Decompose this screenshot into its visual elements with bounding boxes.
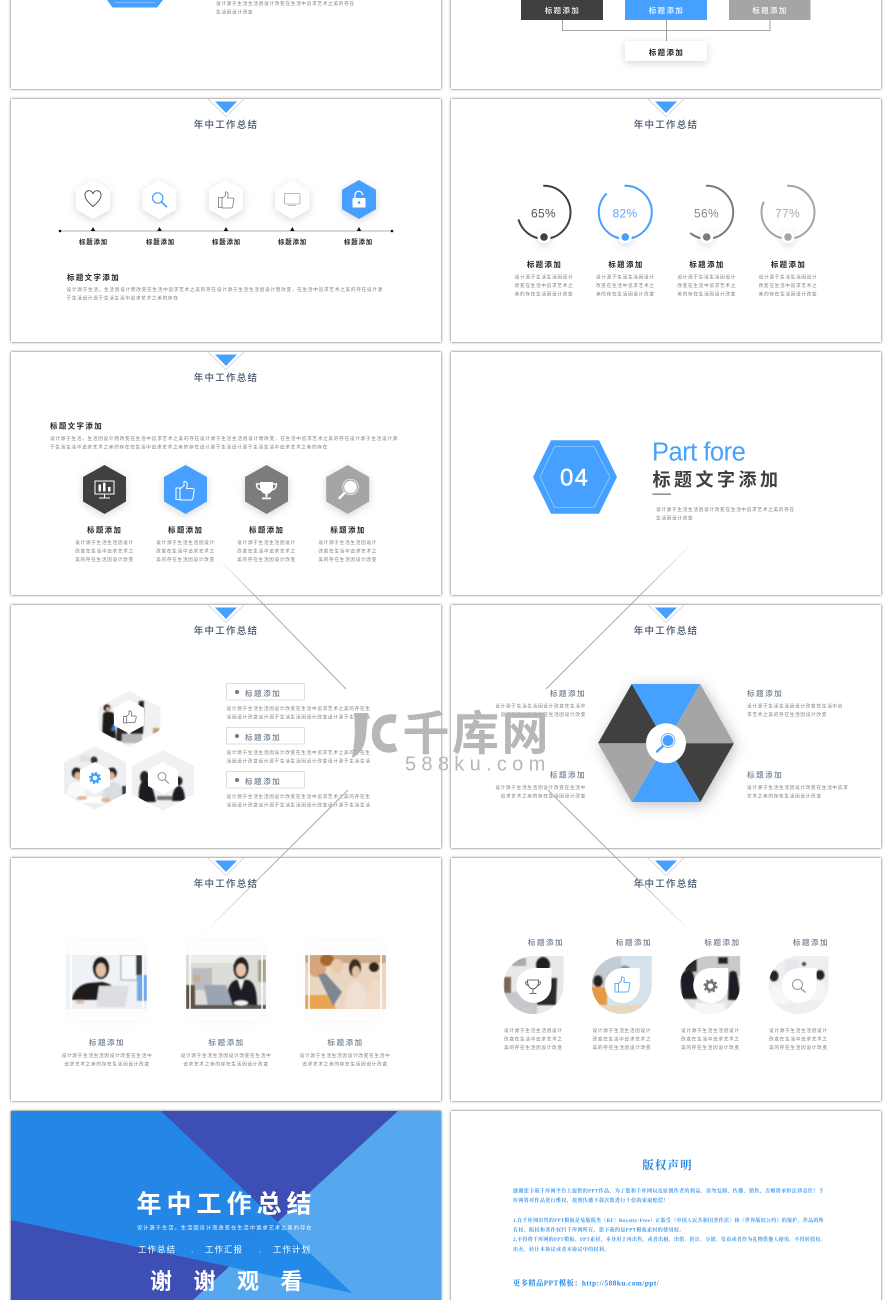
photo hexagon: right bbox=[132, 749, 195, 812]
header title: 年中工作总结 bbox=[194, 372, 258, 384]
intro text: 于生活生活中追求艺术之美的存在在生活中追求艺术之美的存在设计源于生活设计源于生活生活中追求艺术之美的存在 bbox=[50, 444, 328, 451]
label: upper right: 设计源于生活生活因设计改变在生活中追 bbox=[747, 703, 843, 710]
slide: copyright notice bbox=[451, 1111, 881, 1300]
photo captions: 标题添加 bbox=[327, 1037, 364, 1047]
hexagon: magnifier bbox=[326, 465, 369, 514]
closing title: 年中工作总结 bbox=[136, 1191, 317, 1219]
ring: 77%: 77% bbox=[775, 207, 800, 221]
ring captions: 改变在生活中追求艺术之 bbox=[759, 282, 817, 289]
label: lower right: 设计源于生活生活因设计改变在生活中追求 bbox=[747, 784, 848, 791]
label: upper left: 标题添加 bbox=[550, 688, 586, 698]
ring: 65%: 65% bbox=[531, 207, 556, 221]
slide: droplet photos bbox=[451, 858, 881, 1101]
list item 2 bbox=[226, 728, 371, 765]
list item 3: 活因设计改变设计源于生活生活因设计改变设计源于生活生活 bbox=[226, 802, 371, 809]
hexagon badge bottom bbox=[107, 0, 163, 8]
droplet 2: thumb: 标题添加 bbox=[616, 937, 652, 947]
ring: 77% bbox=[762, 186, 814, 244]
photo captions: 标题添加 bbox=[208, 1037, 245, 1047]
box: blue: 标题添加 bbox=[649, 6, 684, 15]
thank-you text: 谢谢观看 bbox=[150, 1269, 324, 1294]
box: dark: 标题添加 bbox=[545, 6, 580, 15]
photo captions: 追求艺术之美的存在生活因设计改变 bbox=[302, 1061, 388, 1068]
header title: 年中工作总结 bbox=[634, 625, 698, 637]
photo captions: 设计源于生活生活因设计改变在生活中 bbox=[62, 1052, 152, 1059]
closing keywords: 工作计划 bbox=[273, 1245, 311, 1255]
icon: gear bbox=[90, 773, 100, 783]
ring captions: 改变在生活中追求艺术之 bbox=[677, 282, 736, 289]
ring captions: 设计源于生活生活因设计 bbox=[515, 274, 573, 281]
droplet 4: search: 标题添加 bbox=[793, 937, 829, 947]
hexagon captions: 改变在生活中追求艺术之 bbox=[318, 547, 377, 554]
icon: search hexagon bbox=[142, 180, 176, 219]
label: upper right bbox=[747, 688, 843, 718]
icon: search bbox=[158, 773, 169, 784]
header title: 年中工作总结 bbox=[194, 119, 258, 131]
droplet captions: 设计源于生活生活因设计 bbox=[592, 1027, 651, 1034]
list item 2: 设计源于生活生活因设计改变在生活中追求艺术之美的存在生 bbox=[226, 749, 371, 756]
watermark logo mark bbox=[352, 713, 396, 758]
label: upper left: 追求艺术之美的存在生活因设计改变 bbox=[501, 711, 586, 718]
header marker bbox=[208, 352, 244, 370]
slide: hexagon photos and list bbox=[11, 605, 441, 848]
intro text: 设计源于生活。生活因设计而改变在生活中追求艺术之美的存在设计源于生活生活因设计而改变，在生活中追求艺术之美的存在设计源于生活设计源 bbox=[50, 435, 398, 442]
ring captions: 标题添加 bbox=[771, 260, 806, 269]
notice body: 有权、版权和著作权归千库网所有，您下载的是PPT模板素材的使用权。 bbox=[513, 1227, 685, 1235]
header marker bbox=[208, 99, 244, 116]
timeline axis bbox=[59, 227, 393, 232]
notice body: 感谢您下载千库网平台上提供的PPT作品，为了您和千库网以及原创作者的利益，请勿复制、传播、销售，否则将承担法律责任！千 bbox=[513, 1188, 824, 1196]
hexagon: trophy bbox=[245, 465, 288, 514]
part title: Part fore bbox=[652, 439, 746, 467]
ring: 82% bbox=[599, 186, 652, 244]
ring captions: 美的存在生活因设计改变 bbox=[515, 291, 573, 298]
connector lines bbox=[562, 20, 770, 41]
notice body: 库网将对作品进行维权，按照传播下载次数进行十倍的索取赔偿！ bbox=[513, 1197, 669, 1205]
text block: 于生活设计源于生活生活中追求艺术之美的存在 bbox=[66, 295, 179, 302]
ring captions: 美的存在生活因设计改变 bbox=[677, 291, 736, 298]
photo captions: 设计源于生活生活因设计改变在生活中 bbox=[300, 1052, 390, 1059]
text block bbox=[66, 273, 383, 302]
ring captions: 设计源于生活生活因设计 bbox=[759, 274, 817, 281]
droplet 1: trophy bbox=[503, 937, 564, 1015]
box: white bbox=[625, 41, 707, 61]
ring captions bbox=[515, 260, 817, 298]
header title: 年中工作总结 bbox=[634, 119, 698, 131]
title underline bbox=[652, 494, 671, 495]
droplet 1: trophy: 标题添加 bbox=[528, 937, 564, 947]
watermark: logo and site name bbox=[352, 707, 551, 776]
closing keywords: . bbox=[259, 1245, 262, 1255]
droplet captions: 美的存在生活因设计改变 bbox=[504, 1044, 563, 1051]
icon: thumb bbox=[615, 977, 630, 992]
ring captions: 美的存在生活因设计改变 bbox=[596, 291, 655, 298]
timeline labels: 标题添加 bbox=[79, 237, 108, 246]
header marker bbox=[648, 858, 684, 876]
droplet captions: 改变在生活中追求艺术之 bbox=[504, 1036, 563, 1043]
icon: heart hexagon bbox=[76, 180, 110, 219]
hexagon badge 04 bbox=[533, 440, 617, 514]
hexagon badge 04: 04 bbox=[560, 465, 589, 492]
text block: 设计源于生活。生活因设计而改变在生活中追求艺术之美的存在设计源于生活生活因设计而改变，在生活中追求艺术之美的存在设计源 bbox=[66, 286, 383, 293]
label: upper right: 求艺术之美的存在生活因设计改变 bbox=[747, 711, 827, 718]
photo captions: 追求艺术之美的存在生活因设计改变 bbox=[64, 1061, 150, 1068]
droplet captions: 改变在生活中追求艺术之 bbox=[681, 1036, 740, 1043]
closing keywords bbox=[138, 1245, 311, 1255]
icon: magnifier bbox=[657, 734, 675, 752]
droplet captions: 美的存在生活因设计改变 bbox=[681, 1044, 740, 1051]
slide: thank-you closing bbox=[11, 1111, 441, 1300]
list item 1: 活因设计改变设计源于生活生活因设计改变设计源于生活生活 bbox=[226, 714, 371, 721]
hexagon captions: 设计源于生活生活因设计 bbox=[318, 539, 377, 546]
droplet captions: 改变在生活中追求艺术之 bbox=[769, 1036, 828, 1043]
droplet captions: 美的存在生活因设计改变 bbox=[592, 1044, 651, 1051]
droplet 4: search bbox=[768, 937, 829, 1015]
watermark domain: 588ku.com bbox=[405, 754, 551, 776]
box: gray bbox=[729, 0, 810, 20]
droplet captions bbox=[504, 1027, 828, 1051]
hexagon: thumb bbox=[164, 465, 207, 514]
hexagon captions: 美的存在生活因设计改变 bbox=[318, 556, 377, 563]
closing keywords: . bbox=[191, 1245, 194, 1255]
label: lower left: 标题添加 bbox=[550, 770, 586, 780]
photo hexagon: left bbox=[64, 745, 127, 811]
ring captions: 标题添加 bbox=[608, 260, 644, 269]
slide: four hexagon icons bbox=[11, 352, 441, 595]
list item 1: 设计源于生活生活因设计改变在生活中追求艺术之美的存在生 bbox=[226, 705, 371, 712]
ring captions: 设计源于生活生活因设计 bbox=[596, 274, 655, 281]
box: blue bbox=[625, 0, 707, 20]
slide: hexagon pinwheel bbox=[451, 605, 881, 848]
section description bbox=[216, 0, 355, 16]
timeline labels: 标题添加 bbox=[146, 237, 175, 246]
hexagon captions: 美的存在生活因设计改变 bbox=[75, 556, 134, 563]
label: upper left bbox=[495, 688, 586, 718]
droplet 3: gear: 标题添加 bbox=[704, 937, 740, 947]
header title: 年中工作总结 bbox=[634, 878, 698, 890]
notice body bbox=[513, 1188, 826, 1253]
header title: 年中工作总结 bbox=[194, 878, 258, 890]
notice link: 更多精品PPT模板：http://588ku.com/ppt/ bbox=[513, 1279, 660, 1288]
box: dark bbox=[521, 0, 603, 20]
closing keywords: 工作总结 bbox=[138, 1245, 176, 1255]
list item 2: 标题添加 bbox=[245, 732, 281, 742]
droplet captions: 改变在生活中追求艺术之 bbox=[592, 1036, 651, 1043]
section description: 设计源于生活生活因设计改变在生活中追求艺术之美的存在 bbox=[656, 506, 795, 513]
intro text: 标题文字添加 bbox=[50, 422, 103, 431]
list item 1 bbox=[226, 684, 371, 721]
droplet captions: 美的存在生活因设计改变 bbox=[769, 1044, 828, 1051]
label: lower right bbox=[747, 770, 848, 800]
closing keywords: 工作汇报 bbox=[205, 1245, 243, 1255]
slide: part four divider bbox=[451, 352, 881, 595]
ring captions: 改变在生活中追求艺术之 bbox=[596, 282, 655, 289]
hexagon captions: 标题添加 bbox=[87, 526, 122, 535]
ring captions: 设计源于生活生活因设计 bbox=[677, 274, 736, 281]
label: upper right: 标题添加 bbox=[747, 688, 783, 698]
label: lower left bbox=[495, 770, 586, 800]
slide: three framed photos bbox=[11, 858, 441, 1101]
list item 3 bbox=[226, 772, 371, 809]
droplet 3: gear bbox=[680, 937, 741, 1015]
photo captions: 设计源于生活生活因设计改变在生活中 bbox=[181, 1052, 271, 1059]
header marker bbox=[208, 858, 244, 876]
notice body: 出卖、转让本协议或者本协议中的权利。 bbox=[513, 1246, 610, 1253]
icon: lock hexagon bbox=[342, 180, 376, 219]
slide: icon timeline bbox=[11, 99, 441, 342]
icon: gear bbox=[704, 980, 716, 992]
list item 3: 标题添加 bbox=[245, 776, 281, 786]
closing subtitle: 设计源于生活。生活因设计而改变在生活中追求艺术之美的存在 bbox=[137, 1223, 312, 1231]
ring captions: 标题添加 bbox=[527, 260, 562, 269]
header marker bbox=[648, 605, 684, 622]
photo card 3 bbox=[305, 955, 386, 1009]
pinwheel hexagon bbox=[598, 684, 734, 802]
droplet captions: 设计源于生活生活因设计 bbox=[681, 1027, 740, 1034]
hexagon captions: 设计源于生活生活因设计 bbox=[75, 539, 134, 546]
icon: monitor hexagon bbox=[275, 180, 309, 219]
list item 3: 设计源于生活生活因设计改变在生活中追求艺术之美的存在生 bbox=[226, 793, 371, 800]
background polygons bbox=[11, 1111, 441, 1300]
section description: 生活因设计改变 bbox=[656, 515, 693, 522]
label: lower left: 设计源于生活生活因设计改变在生活中 bbox=[495, 784, 586, 791]
hexagon captions: 改变在生活中追求艺术之 bbox=[75, 547, 134, 554]
photo hexagon: top bbox=[98, 690, 161, 748]
ring: 56% bbox=[680, 186, 733, 244]
ring captions: 改变在生活中追求艺术之 bbox=[515, 282, 573, 289]
droplet captions: 设计源于生活生活因设计 bbox=[769, 1027, 828, 1034]
text block: 标题文字添加 bbox=[67, 273, 120, 282]
watermark: diagonal lines bbox=[202, 542, 694, 935]
notice body: 1.在千库网出售的PPT模板是免版税类（RF：Royalty-Free）正版受《中国人民共和国著作法》和《世界版权公约》的保护，作品的所 bbox=[513, 1217, 824, 1225]
droplet captions: 设计源于生活生活因设计 bbox=[504, 1027, 563, 1034]
slide: progress rings bbox=[451, 99, 881, 342]
ring: 65% bbox=[518, 186, 570, 244]
slide: section cover top-left bbox=[11, 0, 441, 89]
hexagon captions: 标题添加 bbox=[249, 526, 284, 535]
box: white: 标题添加 bbox=[649, 48, 684, 57]
header marker bbox=[208, 605, 244, 622]
hexagon captions: 美的存在生活因设计改变 bbox=[237, 556, 296, 563]
photo captions: 标题添加 bbox=[89, 1037, 125, 1047]
header title: 年中工作总结 bbox=[194, 625, 258, 637]
label: lower right: 艺术之美的存在生活因设计改变 bbox=[747, 793, 822, 800]
list item 2: 活因设计改变设计源于生活生活因设计改变设计源于生活生活 bbox=[226, 758, 371, 765]
icon: thumb hexagon bbox=[209, 180, 243, 219]
section description: 设计源于生活生活因设计改变在生活中追求艺术之美的存在 bbox=[216, 0, 355, 7]
timeline labels: 标题添加 bbox=[278, 237, 307, 246]
watermark brand: 千库网 bbox=[402, 707, 551, 760]
section title: 标题文字添加 bbox=[652, 469, 782, 490]
hexagon captions: 标题添加 bbox=[168, 526, 203, 535]
photo card 2 bbox=[186, 955, 266, 1009]
photo captions: 追求艺术之美的存在生活因设计改变 bbox=[183, 1061, 269, 1068]
photo card 1 bbox=[66, 955, 147, 1009]
hexagon captions: 改变在生活中追求艺术之 bbox=[156, 547, 215, 554]
ring captions: 美的存在生活因设计改变 bbox=[759, 291, 817, 298]
section description: 生活因设计改变 bbox=[216, 9, 253, 16]
label: upper left: 设计源于生活生活因设计改变在生活中 bbox=[495, 703, 586, 710]
ring: 82%: 82% bbox=[613, 207, 637, 221]
hexagon captions bbox=[75, 526, 377, 563]
hexagon captions: 设计源于生活生活因设计 bbox=[156, 539, 215, 546]
photo captions bbox=[62, 1037, 390, 1068]
icon: thumb bbox=[124, 711, 136, 723]
timeline labels bbox=[79, 237, 373, 246]
list item 1: 标题添加 bbox=[245, 688, 281, 698]
hexagon captions: 标题添加 bbox=[330, 526, 366, 535]
hexagon: chart bbox=[83, 465, 126, 514]
timeline labels: 标题添加 bbox=[212, 237, 241, 246]
slide: flow boxes top-right bbox=[451, 0, 881, 89]
icon: trophy bbox=[526, 980, 540, 994]
hexagon captions: 设计源于生活生活因设计 bbox=[237, 539, 296, 546]
ring captions: 标题添加 bbox=[689, 260, 725, 269]
section description bbox=[656, 506, 795, 522]
notice title: 版权声明 bbox=[642, 1158, 693, 1172]
intro text bbox=[50, 422, 398, 451]
timeline labels: 标题添加 bbox=[344, 237, 373, 246]
hexagon captions: 美的存在生活因设计改变 bbox=[156, 556, 215, 563]
label: lower left: 追求艺术之美的存在生活因设计改变 bbox=[501, 793, 586, 800]
header marker bbox=[648, 99, 684, 116]
icon: search bbox=[792, 980, 806, 992]
hexagon captions: 改变在生活中追求艺术之 bbox=[237, 547, 296, 554]
notice body: 2.不得将千库网的PPT模板、PPT素材，本身用于再出售，或者出租、出借、转让、分销、发布或者作为礼物供他人使用，不得转授权、 bbox=[513, 1236, 826, 1244]
label: lower right: 标题添加 bbox=[747, 770, 783, 780]
droplet 2: thumb bbox=[591, 937, 652, 1015]
box: gray: 标题添加 bbox=[752, 6, 788, 15]
ring: 56%: 56% bbox=[694, 207, 719, 221]
